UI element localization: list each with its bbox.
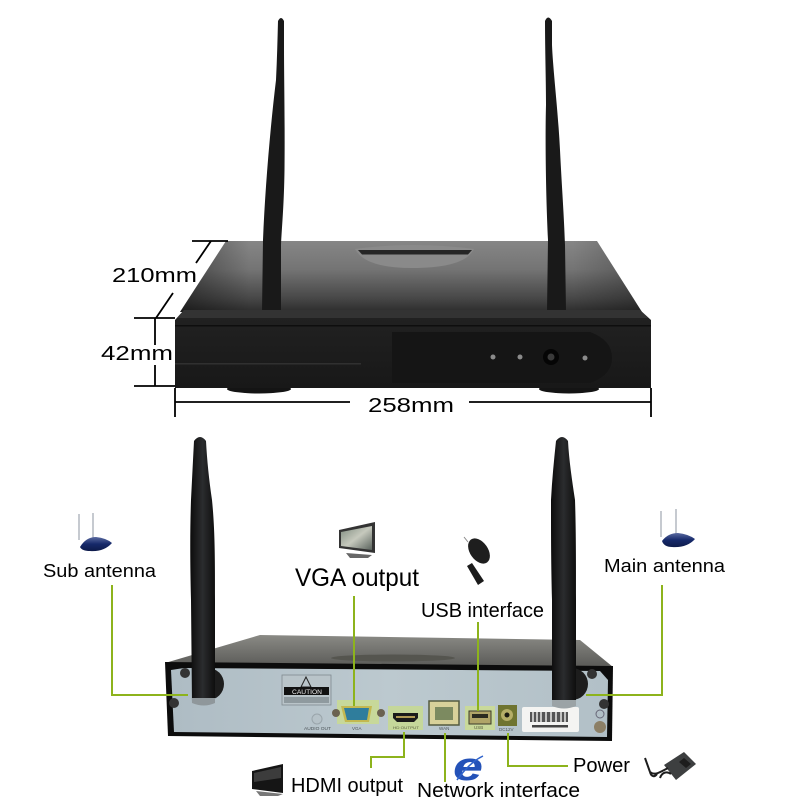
- label: power: Power: [573, 755, 630, 777]
- panel: front view of recorder: [175, 18, 651, 394]
- icon: HDMI television: [252, 764, 283, 796]
- leader lines: [112, 585, 662, 782]
- label: VGA output: VGA output: [295, 564, 419, 592]
- audio out port: [304, 714, 331, 731]
- leader: network interface: [444, 733, 446, 782]
- panel: rear view of recorder: [165, 437, 613, 741]
- dimension: height 42mm: [101, 318, 175, 386]
- barcode sticker: [522, 707, 579, 732]
- leader: USB interface: [477, 622, 479, 711]
- recorder feet: [227, 384, 599, 394]
- leader: power: [508, 733, 568, 766]
- label: network interface: Network interface: [417, 780, 580, 802]
- HDMI port: [388, 706, 423, 730]
- caution label: CAUTION: [292, 690, 322, 696]
- leader: VGA output: [353, 596, 355, 706]
- caution label: [282, 675, 331, 705]
- icon: sub antenna router: [79, 513, 112, 551]
- VGA port: VGA: [352, 726, 362, 731]
- dimension: width 258mm: 258mm: [368, 395, 454, 417]
- icon: sub antenna on rear: [190, 437, 224, 706]
- icon: main antenna on rear: [551, 437, 588, 708]
- recorder top surface: [180, 241, 642, 312]
- icon: VGA monitor: [339, 522, 375, 558]
- leader: main antenna: [586, 585, 662, 695]
- leader: HDMI output: [371, 732, 404, 768]
- label: main antenna: Main antenna: [604, 556, 726, 576]
- recorder front face: [175, 310, 651, 388]
- label: HDMI output: HDMI output: [291, 775, 403, 797]
- dimension: width 258mm: [175, 388, 651, 417]
- dimension: height 42mm: 42mm: [101, 343, 173, 365]
- audio out port: AUDIO OUT: [304, 726, 331, 731]
- WAN port: WAN: [439, 726, 449, 731]
- recorder rear top surface: [165, 635, 613, 667]
- icon: power adapter: [645, 752, 696, 780]
- dimension: depth 210mm: [112, 241, 228, 318]
- HDMI port: HD OUTPUT: [393, 725, 420, 730]
- icon: front left antenna: [262, 18, 285, 312]
- icon: front right antenna: [545, 18, 566, 312]
- label: USB interface: USB interface: [421, 600, 544, 622]
- power port: [498, 705, 517, 732]
- dimension: depth 210mm: 210mm: [112, 265, 197, 287]
- icon: main antenna router: [661, 509, 695, 547]
- icon: USB mouse and stick: [464, 534, 494, 585]
- USB port: [465, 706, 495, 730]
- VGA port: [332, 700, 385, 731]
- recorder rear panel: [165, 662, 613, 741]
- leader: sub antenna: [112, 585, 188, 695]
- WAN port: [429, 701, 459, 731]
- label: sub antenna: Sub antenna: [43, 561, 157, 581]
- USB port: USB: [474, 725, 483, 730]
- power port: DC12V: [499, 727, 514, 732]
- icon: internet browser: e: [453, 745, 483, 789]
